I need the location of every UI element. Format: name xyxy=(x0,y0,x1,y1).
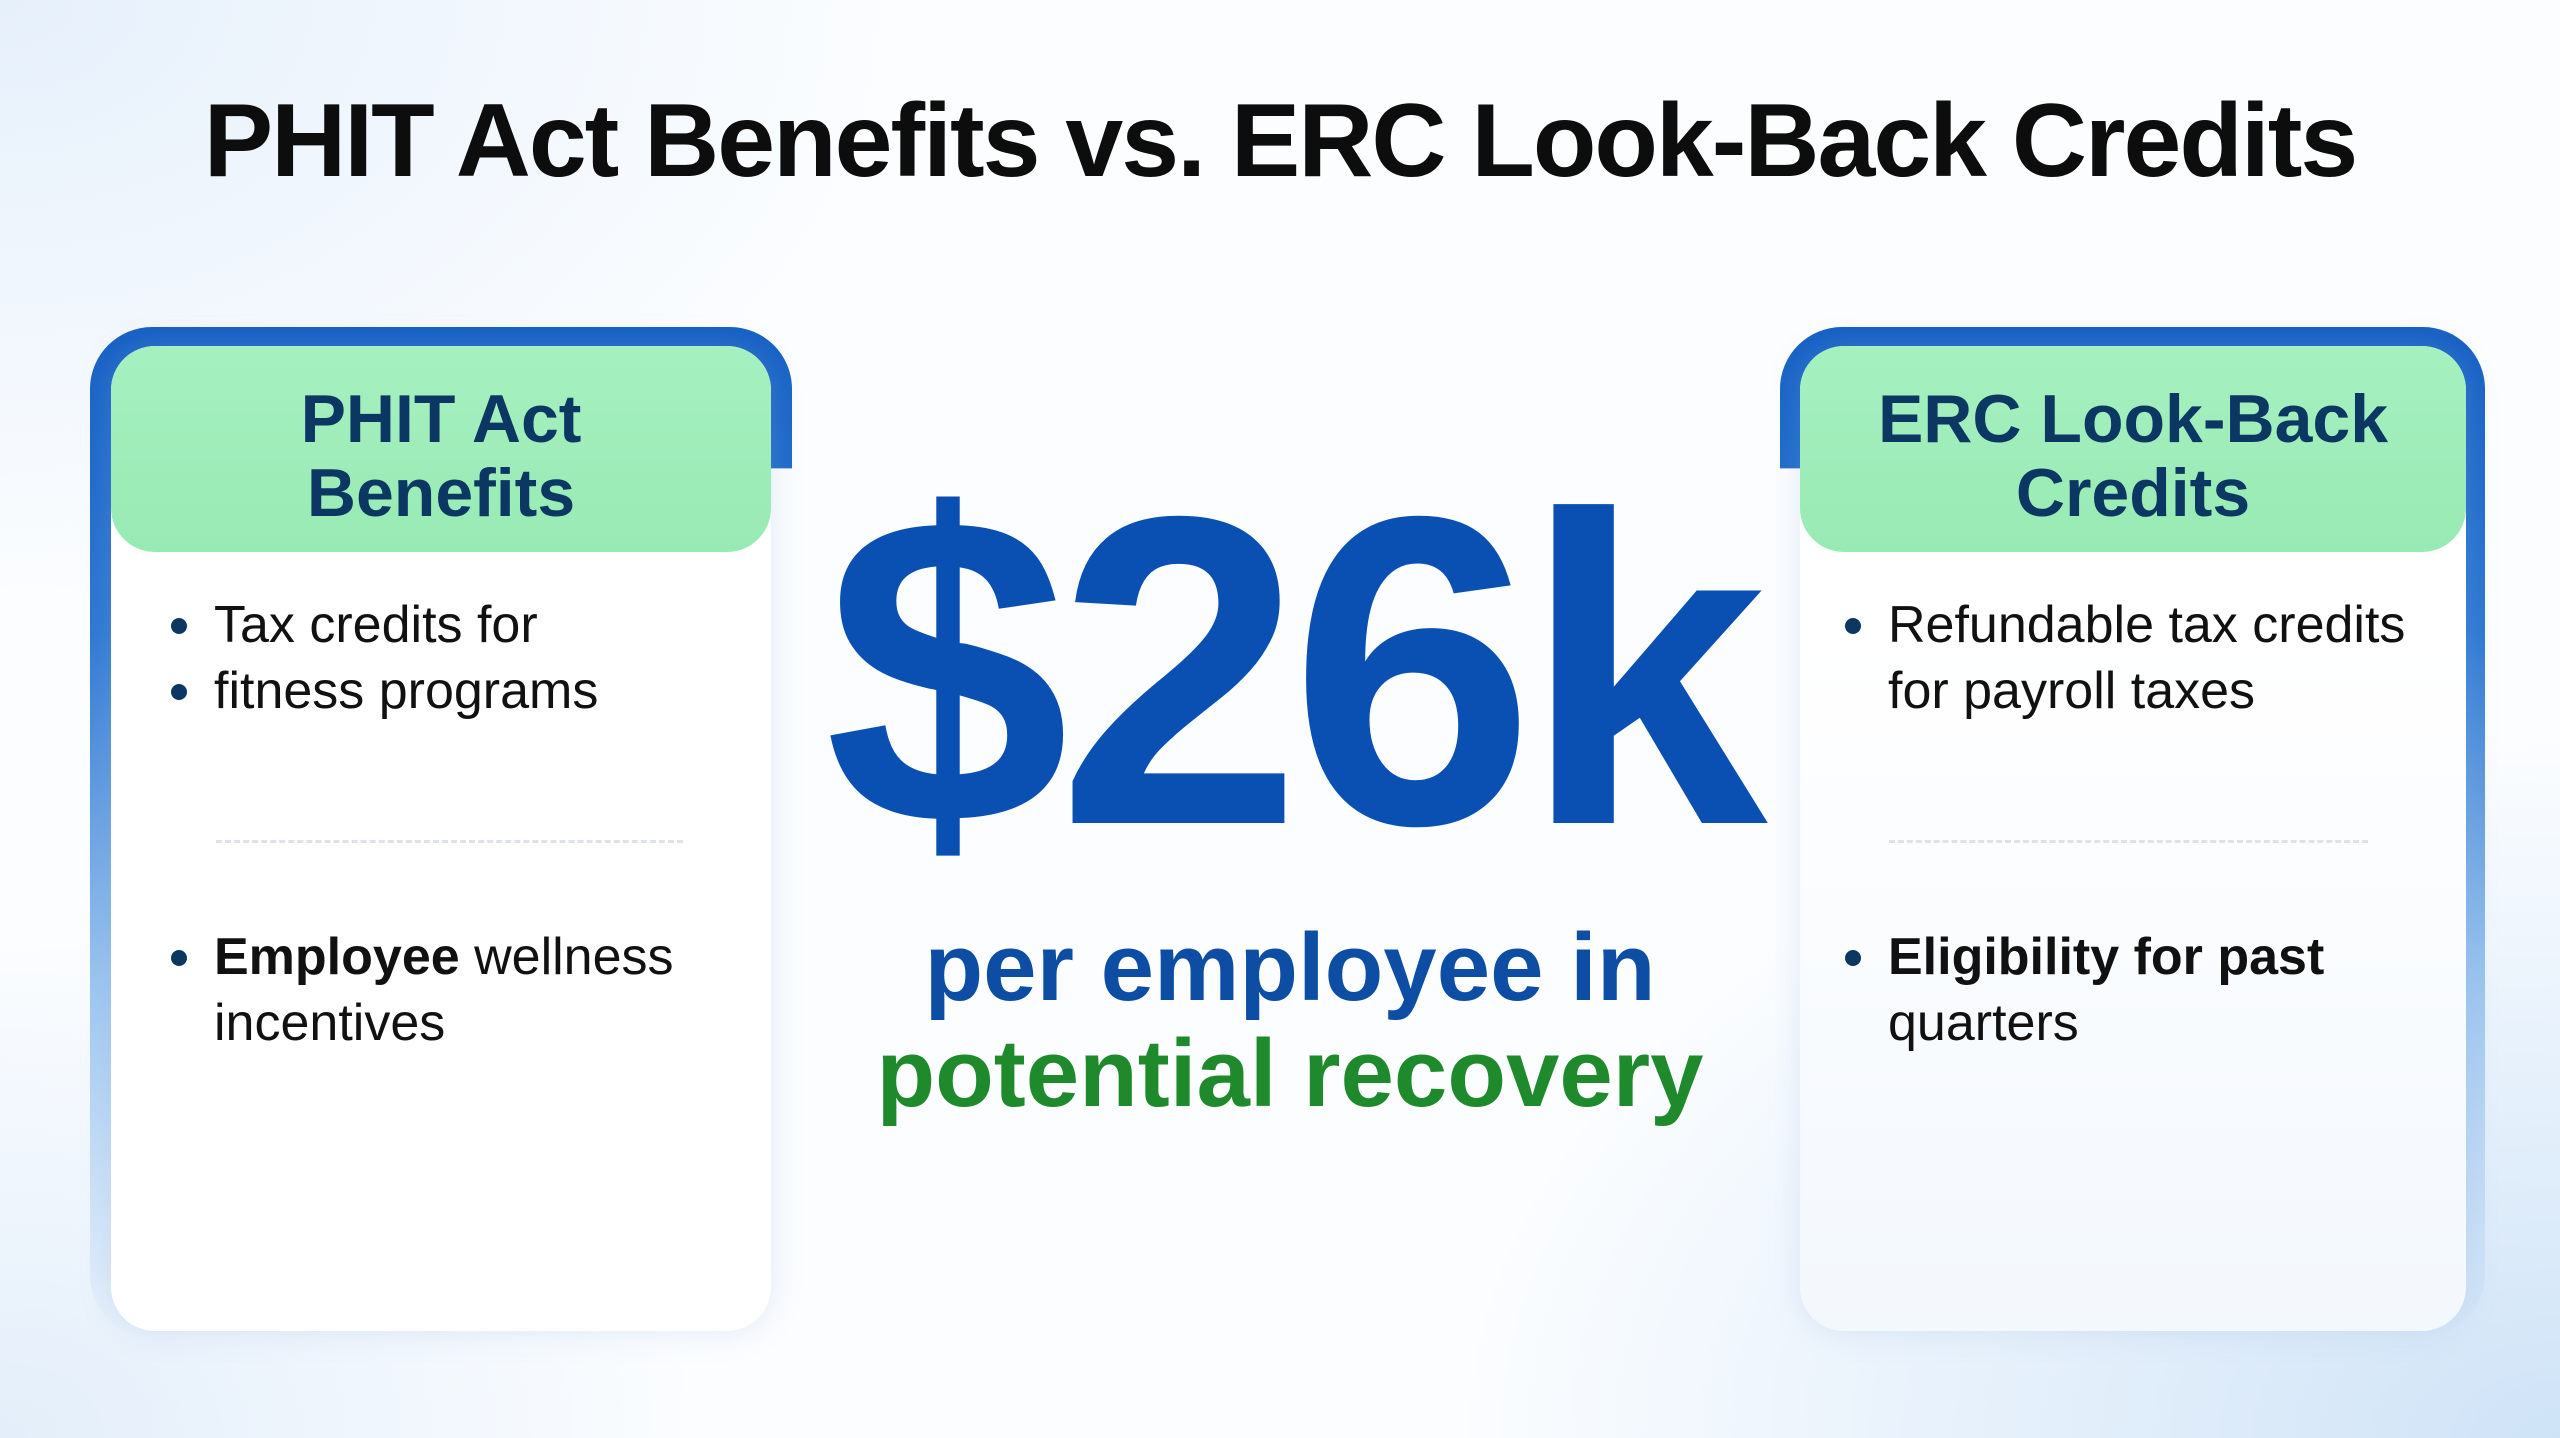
heading: ERC Look-Back Credits: ERC Look-Back xyxy=(1878,381,2388,457)
bullet: employee wellness: Employee wellness xyxy=(214,928,674,986)
bullets: refundable credits: Refundable tax credits xyxy=(1888,596,2405,654)
stat caption: potential recovery xyxy=(877,1020,1703,1127)
heading: ERC Look-Back Credits xyxy=(1800,346,2466,552)
bullet: employee wellness xyxy=(171,928,674,1052)
bullet: employee wellness: incentives xyxy=(214,994,445,1052)
title: PHIT Act Benefits vs. ERC Look-Back Credits xyxy=(204,83,2356,199)
panel: ERC Look-Back Credits xyxy=(1780,327,2485,1336)
bullets: tax credits: fitness programs xyxy=(214,662,598,720)
bullets: tax credits xyxy=(171,596,598,720)
heading: ERC Look-Back Credits: Credits xyxy=(2016,455,2250,531)
heading: PHIT Act Benefits xyxy=(111,346,771,552)
bullet: eligibility: Eligibility for past xyxy=(1888,928,2324,986)
bullets: refundable credits xyxy=(1845,596,2405,720)
bullet: eligibility xyxy=(1845,928,2324,1052)
bullets: refundable credits: for payroll taxes xyxy=(1888,662,2255,720)
heading: PHIT Act Benefits: Benefits xyxy=(307,455,575,531)
stat caption xyxy=(877,914,1703,1127)
stat caption: per employee in xyxy=(925,914,1655,1021)
big stat: $26k: $26k xyxy=(825,426,1755,917)
panel: PHIT Act Benefits xyxy=(90,327,792,1338)
bullets: tax credits: Tax credits for xyxy=(214,596,538,654)
bullet: eligibility: quarters xyxy=(1888,994,2079,1052)
heading: PHIT Act Benefits: PHIT Act xyxy=(301,381,581,457)
